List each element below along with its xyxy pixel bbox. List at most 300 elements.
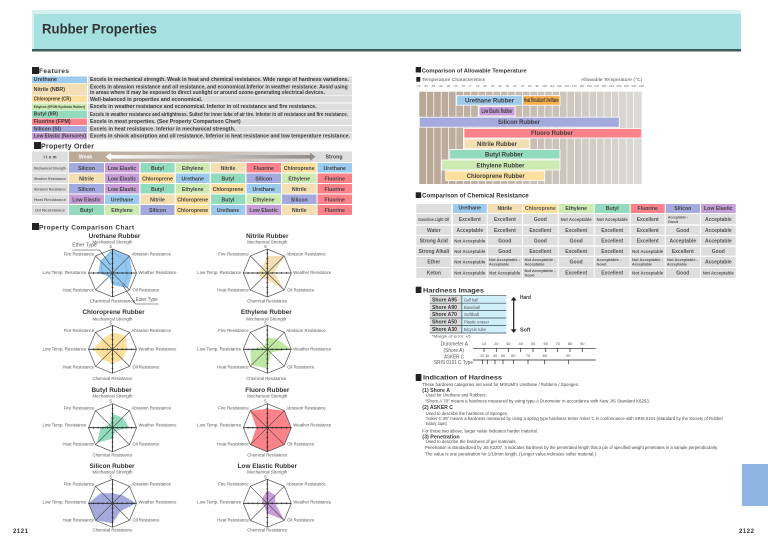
temperature axis labels: -40	[438, 84, 443, 88]
temperature axis labels: 60	[513, 84, 517, 88]
hardness table	[430, 296, 506, 333]
chemical resistance table body: Not Acceptable	[454, 260, 486, 265]
radar chart: silicon rubber	[42, 463, 177, 532]
property order grid: Fluorine	[324, 208, 345, 214]
chemical resistance table body: Strong Alkali	[418, 249, 450, 255]
heading: features: Features	[39, 68, 69, 75]
chemical resistance table body: Good	[570, 238, 583, 244]
arrow: weak to strong	[106, 153, 316, 161]
radar chart: low elastic rubber: Mechanical Strength	[247, 469, 288, 474]
temperature bar labels: Heat Resistant Urethane	[524, 97, 559, 104]
temperature bar labels: Butyl Rubber	[485, 152, 524, 158]
radar chart: low elastic rubber: Oil Resistance	[287, 517, 315, 522]
radar chart: butyl rubber: Oil Resistance	[132, 442, 160, 447]
chemical resistance table header: Chloroprene	[525, 206, 556, 212]
property order grid: Chloroprene	[142, 176, 173, 182]
chemical resistance table body: Acceptable	[456, 228, 483, 234]
radar chart: silicon rubber: Silicon Rubber	[89, 463, 135, 470]
radar chart: butyl rubber: Butyl Rubber	[91, 387, 132, 394]
radar chart: ethylene rubber	[197, 309, 332, 381]
chemical resistance table body: Good	[668, 220, 679, 224]
radar chart: chloroprene rubber	[42, 309, 177, 381]
temperature axis labels: -70	[416, 84, 421, 88]
hardness scale: 10	[482, 341, 487, 346]
hardness scale: 50	[531, 341, 536, 346]
temperature bar labels: Urethane Rubber	[465, 98, 515, 104]
radar chart: chloroprene rubber: Fire Resistance	[64, 328, 95, 333]
chemical resistance table header: Nitrile	[497, 206, 512, 212]
features table: Excels in mechanical strength. Weak in heat and chemical resistance. Wide range of hardness variations.	[90, 77, 350, 83]
radar chart: butyl rubber: Low Temp. Resistance	[42, 423, 87, 428]
hardness explanation text: (1) Shore A	[422, 388, 450, 394]
subheading row: Temperature Characteristics	[422, 77, 486, 82]
features table: Excels in most properties. (See Property Comparison Chart)	[90, 119, 241, 125]
radar chart: fluoro rubber: Low Temp. Resistance	[197, 423, 242, 428]
hardness explanation text: Penetration is standardized by JIS K2207. It indicates hardness by the penetrated length that a pin of specified weight penetrates in a sample perpendicularly.	[425, 445, 718, 450]
hardness explanation text: Used for Urethane and Rubbers.	[426, 392, 487, 398]
radar chart: ethylene rubber: Fire Resistance	[218, 328, 249, 333]
header banner	[32, 10, 741, 52]
chemical resistance table body: Excellent	[601, 228, 624, 234]
property order grid: Silicon	[255, 176, 272, 182]
chemical resistance table body: Gasoline Light Oil	[418, 217, 449, 222]
hardness explanation text: Industry, Japan).	[426, 421, 448, 426]
hardness scale: 70	[555, 341, 561, 346]
temperature axis labels: 30	[491, 84, 495, 88]
property order grid: Butyl	[151, 166, 165, 172]
property order grid: Butyl	[222, 176, 235, 182]
temperature axis labels: 210	[624, 84, 629, 88]
features table: Excels in abrasion resistance and oil resistance, and economical.Inferior in weather resistance. Avoid using	[90, 85, 348, 91]
hardness scale: 80	[568, 341, 573, 346]
radar chart: chloroprene rubber: Heat Resistance	[62, 364, 95, 369]
radar chart: nitrile rubber: 5	[264, 244, 267, 249]
chemical resistance table body: Excellent	[672, 249, 694, 255]
temperature axis labels: 230	[639, 84, 644, 88]
chemical resistance table body: Acceptable -	[596, 258, 622, 262]
temperature axis labels: 50	[506, 84, 509, 88]
features table: Nitrile (NBR)	[34, 87, 65, 93]
chemical resistance table body: Excellent	[565, 249, 588, 255]
chemical resistance table body: Strong Acid	[420, 238, 448, 244]
radar chart: urethane rubber: Urethane Rubber	[89, 233, 141, 240]
property order grid: Ethylene	[288, 176, 310, 182]
page tab	[742, 464, 768, 506]
chemical resistance table body: Excellent	[494, 228, 516, 234]
chemical resistance table body: Acceptable	[705, 217, 732, 223]
radar chart: ethylene rubber: Abrasion Resistance	[286, 328, 326, 333]
temperature bar labels: Silicon Rubber	[498, 119, 541, 126]
hardness explanation text: "Asker C 25" means a hardness measured by using a spring type hardness tester Asker C in conformance with SRIS 0101 (Standard by the Society of Rubber	[425, 416, 724, 421]
temperature range bars	[419, 96, 642, 180]
chemical resistance table body: Not Acceptable	[489, 271, 521, 276]
chemical resistance table body: Not Acceptable	[703, 271, 734, 276]
radar chart: low elastic rubber: Low Elastic Rubber	[238, 463, 297, 470]
features table	[32, 76, 352, 140]
radar chart: fluoro rubber	[197, 387, 332, 457]
temperature axis labels: -50	[431, 84, 436, 88]
radar chart: urethane rubber: Low Temp. Resistance	[42, 270, 87, 275]
features table: Chloroprene (CR)	[34, 97, 71, 103]
temperature stripes	[419, 92, 642, 184]
temperature bar labels: Nitrile Rubber	[477, 141, 518, 148]
radar chart: ethylene rubber: Ethylene Rubber	[241, 309, 292, 316]
property order grid: Urethane	[252, 187, 275, 193]
radar chart: silicon rubber: Mechanical Strength	[92, 469, 133, 474]
property order grid: Abrasion Resistance	[34, 187, 66, 191]
arrow: hard to soft	[511, 295, 531, 334]
features table: Excels in weather resistance and airtightness. Suited for inner tube of air tire. Inferior in oil resistance and fire resistance.	[90, 112, 349, 118]
chemical resistance table body: Acceptable	[705, 238, 732, 244]
temperature axis labels: 0	[469, 84, 471, 88]
radar chart: silicon rubber: Low Temp. Resistance	[42, 499, 87, 504]
radar chart: urethane rubber: Fire Resistance	[64, 252, 95, 256]
chemical resistance table body: Not Acceptable -	[489, 258, 521, 262]
chemical resistance table body: Excellent	[601, 271, 624, 277]
subheading row: Allowable Temperature (°C)	[581, 77, 643, 82]
chemical resistance table body: Not Acceptable	[632, 271, 664, 276]
title: Rubber Properties	[42, 22, 157, 36]
hardness scale: 80	[542, 353, 548, 358]
features table: Excels in weather resistance and economical. Inferior in oil resistance and fire resistance.	[90, 104, 317, 110]
radar chart: chloroprene rubber: Mechanical Strength	[92, 316, 133, 321]
radar chart: low elastic rubber: 5	[264, 474, 267, 479]
chemical resistance table body: Not Acceptable -	[524, 258, 556, 262]
chemical resistance table body: Excellent	[529, 228, 552, 234]
chemical resistance table body: Acceptable	[705, 260, 732, 266]
radar chart: nitrile rubber: Mechanical Strength	[247, 240, 288, 244]
temperature bar labels: Low Elastic Rubber	[482, 108, 513, 115]
hardness table: Golf ball	[464, 297, 478, 302]
panel: chemical resistance	[416, 192, 736, 278]
property order grid: Heat Resistance	[34, 198, 66, 202]
temperature axis labels: 120	[557, 84, 562, 88]
features table: Silicon (SI)	[34, 126, 61, 132]
temperature axis labels: 110	[550, 84, 555, 88]
radar chart: chloroprene rubber: Chemical Resistance	[92, 376, 133, 381]
radar chart: butyl rubber: Chemical Resistance	[92, 452, 133, 457]
radar chart: fluoro rubber: Oil Resistance	[287, 442, 315, 447]
chemical resistance table body: Good	[676, 228, 689, 234]
weak to strong scale: Weak	[79, 154, 92, 160]
chemical resistance table body: Excellent	[637, 228, 659, 234]
radar chart: ethylene rubber: Weather Resistance	[293, 346, 332, 351]
panel: features	[32, 67, 352, 140]
temperature axis labels	[416, 84, 644, 88]
radar chart: fluoro rubber: Chemical Resistance	[247, 452, 288, 457]
panel: hardness images	[416, 287, 596, 366]
chemical resistance table body: Not Acceptable -	[524, 269, 556, 273]
radar chart: low elastic rubber: Abrasion Resistance	[286, 481, 326, 486]
radar chart: urethane rubber: Heat Resistance	[62, 288, 95, 292]
radar chart: butyl rubber: Abrasion Resistance	[132, 406, 172, 411]
hardness explanation text	[422, 382, 724, 456]
radar chart: ethylene rubber: Heat Resistance	[217, 364, 249, 369]
hardness scale: 40	[493, 353, 498, 358]
radar chart: fluoro rubber: Fluoro Rubber	[245, 387, 290, 394]
radar chart: fluoro rubber: Weather Resistance	[293, 423, 332, 428]
hardness explanation text: These hardness categories are used for MISUMI's Urethane / Rubbers / Sponges.	[422, 382, 579, 387]
hardness table: Shore A90	[432, 305, 457, 311]
radar chart: nitrile rubber: Weather Resistance	[293, 270, 332, 275]
radar chart: urethane rubber: Mechanical Strength	[92, 240, 133, 244]
temperature axis labels: 10	[476, 84, 480, 88]
radar chart: nitrile rubber: Heat Resistance	[217, 288, 249, 292]
hardness scale: 60	[543, 341, 549, 346]
property order grid: Chloroprene	[213, 187, 244, 193]
chemical resistance table header: Fluorine	[637, 206, 658, 212]
radar chart: urethane rubber	[42, 233, 177, 304]
chemical resistance table body: Excellent	[459, 217, 481, 223]
property order grid: Nitrile	[79, 176, 94, 182]
features table: Well-balanced in properties and economical.	[90, 97, 203, 103]
chemical resistance table body: Acceptable	[489, 262, 509, 266]
chemical resistance table body: Acceptable	[524, 262, 544, 266]
heading: allowable temperature: Comparison of Allowable Temperature	[422, 68, 527, 74]
hardness scale: Durometer A	[441, 342, 468, 348]
radar chart: low elastic rubber: Weather Resistance	[293, 499, 332, 504]
radar chart: butyl rubber: 5	[110, 399, 112, 404]
chemical resistance table body: Acceptable	[667, 262, 687, 266]
radar chart: butyl rubber: Heat Resistance	[62, 442, 95, 447]
property order grid: Butyl	[222, 197, 235, 203]
temperature axis labels: 200	[616, 84, 622, 88]
chemical resistance table body	[416, 214, 736, 278]
radar chart: urethane rubber: Oil Resistance	[132, 288, 160, 292]
chemical resistance table body: Good	[712, 249, 725, 255]
hardness explanation text: Used to describe the hardness of gel materials.	[426, 439, 517, 444]
property order grid: Low Elastic	[108, 187, 136, 193]
radar chart: fluoro rubber: Abrasion Resistance	[286, 406, 326, 411]
temperature axis labels: 170	[594, 84, 599, 88]
hardness scale: 40	[518, 341, 524, 346]
features table: Excels in heat resistance. Inferior in mechanical strength.	[90, 126, 236, 132]
radar chart: nitrile rubber: Chemical Resistance	[247, 298, 288, 303]
hardness scale: 30	[506, 341, 511, 346]
chemical resistance table body: Not Acceptable -	[667, 258, 699, 262]
hardness scale: 30	[485, 353, 490, 358]
temperature axis labels: 70	[521, 84, 524, 88]
property order grid: Chloroprene	[284, 166, 315, 172]
property order grid: Silicon	[149, 208, 166, 214]
radar chart: ethylene rubber: Oil Resistance	[287, 364, 315, 369]
temperature axis labels: 40	[498, 84, 502, 88]
radar chart: fluoro rubber: Heat Resistance	[217, 442, 249, 447]
temperature bar labels: Ethylene Rubber	[476, 162, 525, 170]
radar chart: silicon rubber: Weather Resistance	[138, 499, 177, 504]
weak to strong scale	[32, 152, 352, 162]
radar chart: nitrile rubber: Low Temp. Resistance	[197, 270, 242, 275]
radar chart: ethylene rubber: Chemical Resistance	[246, 376, 287, 381]
radar chart: chloroprene rubber: Chloroprene Rubber	[82, 309, 145, 316]
temperature axis labels: -60	[424, 84, 428, 88]
features table: Butyl (IIR)	[34, 112, 58, 118]
radar chart: nitrile rubber: Abrasion Resistance	[286, 252, 326, 256]
panel: property comparison chart	[32, 223, 332, 532]
hardness table: Softball	[464, 312, 479, 317]
hardness scale	[434, 341, 596, 366]
chemical resistance table body: Not Acceptable	[454, 238, 486, 243]
chemical resistance table body: Good	[524, 274, 535, 278]
temperature axis labels: 140	[572, 84, 577, 88]
heading: property comparison chart: Property Comparison Chart	[39, 224, 135, 231]
page number: left: 2121	[13, 529, 29, 535]
chemical resistance table body: Acceptable -	[668, 215, 689, 219]
chemical resistance table body: Ether	[427, 260, 440, 266]
radar chart: silicon rubber: Oil Resistance	[132, 517, 160, 522]
hardness explanation text: (3) Penetration	[422, 435, 460, 441]
chemical resistance table header: Butyl	[606, 206, 619, 212]
chemical resistance table body: Good	[534, 217, 547, 223]
property order grid: Low Elastic	[108, 166, 136, 172]
property order grid: Silicon	[78, 187, 95, 193]
hardness table: Bicycle tube	[464, 327, 487, 332]
hardness table: Shore A95	[432, 297, 457, 303]
radar chart: urethane rubber: 5	[110, 244, 112, 249]
property order grid: Fluorine	[324, 176, 345, 182]
chemical resistance table body: Acceptable	[632, 262, 652, 266]
hardness scale: (Shore A)	[444, 348, 464, 354]
radar chart: urethane rubber: Weather Resistance	[138, 270, 177, 275]
features table: Low Elastic (Norsorex)	[34, 134, 86, 140]
chemical resistance table body: Excellent	[637, 238, 659, 244]
arrow: hard to soft: Hard	[520, 295, 531, 301]
page number: right: 2122	[739, 529, 755, 535]
radar chart: chloroprene rubber: Weather Resistance	[138, 346, 177, 351]
weak to strong scale: Item	[44, 154, 57, 160]
temperature axis labels: 160	[587, 84, 592, 88]
property order grid: Ethylene	[253, 197, 275, 203]
radar chart: nitrile rubber: Fire Resistance	[218, 252, 249, 256]
chemical resistance table body: Good	[498, 249, 511, 255]
chemical resistance table body: Good	[534, 238, 547, 244]
property order grid: Low Elastic	[72, 197, 101, 203]
heading: hardness images: Hardness Images	[423, 288, 484, 294]
property order grid: Chloroprene	[177, 208, 208, 214]
hardness explanation text: The value is one penetration for 1/10mm length. (Longer value indicates softer material.)	[425, 452, 597, 456]
heading: property order: Property Order	[41, 144, 94, 150]
property order grid: Urethane	[111, 197, 133, 203]
radar chart: butyl rubber: Weather Resistance	[138, 423, 177, 428]
hardness table: Baseball	[464, 305, 480, 310]
chemical resistance table body: Not Acceptable	[454, 271, 486, 276]
property order grid: Urethane	[181, 176, 204, 182]
chemical resistance table body: Good	[498, 238, 511, 244]
radar chart: low elastic rubber: Low Temp. Resistance	[197, 499, 242, 504]
radar chart: silicon rubber: 5	[110, 474, 112, 479]
heading: chemical resistance: Comparison of Chemical Resistance	[422, 194, 529, 200]
temperature axis labels: -10	[461, 84, 465, 88]
property order grid: Urethane	[323, 166, 346, 172]
chemical resistance table body: Not Acceptable	[561, 217, 592, 222]
chemical resistance table body: Good	[570, 260, 583, 266]
chemical resistance table header: Silicon	[674, 206, 691, 212]
radar chart: fluoro rubber: Fire Resistance	[218, 406, 249, 411]
hardness scale: 60	[511, 353, 516, 358]
property order grid: Urethane	[217, 208, 239, 214]
property order grid: Nitrile	[221, 166, 235, 172]
chemical resistance table header: Low Elastic	[704, 206, 733, 212]
temperature axis labels: 130	[564, 84, 570, 88]
chemical resistance table body: Excellent	[637, 217, 659, 223]
temperature axis labels: 20	[484, 84, 487, 88]
hardness table: Plastic eraser	[464, 320, 490, 325]
radar chart: chloroprene rubber: Low Temp. Resistance	[42, 346, 87, 351]
subheading row	[416, 77, 643, 82]
chemical resistance table body: Keton	[427, 271, 441, 277]
chemical resistance table body: Not Acceptable	[454, 249, 486, 254]
hardness scale: ASKER C	[444, 354, 464, 360]
property order grid: Nitrile	[150, 197, 165, 203]
features table: Urethane	[34, 77, 57, 83]
chemical resistance table body: Excellent	[494, 217, 516, 223]
hardness scale: 90	[580, 341, 585, 346]
radar chart: butyl rubber: Fire Resistance	[64, 406, 95, 411]
chemical resistance table body: Not Acceptable	[632, 249, 664, 254]
panel: allowable temperature	[416, 67, 644, 184]
temperature axis labels: 150	[579, 84, 585, 88]
property order grid: Nitrile	[292, 208, 307, 214]
radar chart: urethane rubber: Abrasion Resistance	[132, 252, 172, 256]
hardness table: Shore A70	[432, 312, 457, 318]
property order grid: Butyl	[80, 208, 94, 214]
panel: indication of hardness	[416, 374, 724, 456]
property order grid: Ethylene	[111, 208, 133, 214]
property order grid: Fluorine	[324, 197, 345, 203]
chemical resistance table header: Ethylene	[565, 206, 587, 212]
hardness table: Shore A30	[432, 327, 457, 333]
chemical resistance table body: Excellent	[565, 271, 588, 277]
chemical resistance table body: Acceptable	[669, 238, 696, 244]
hardness scale: 20	[480, 353, 485, 358]
temperature axis labels: 80	[528, 84, 532, 88]
hardness explanation text: "Shore A 70" means a hardness measured by using type-A Durometer in accordance with New JIS Standard K6253.	[425, 398, 650, 404]
temperature axis labels: -30	[446, 84, 450, 88]
hardness explanation text: Used to describe the hardness of Sponges.	[426, 411, 508, 416]
property order grid	[32, 163, 352, 215]
radar chart: chloroprene rubber: Abrasion Resistance	[132, 328, 172, 333]
property order grid: Low Elastic	[108, 176, 136, 182]
hardness scale: 20	[494, 341, 499, 346]
temperature bar labels: Fluoro Rubber	[531, 130, 574, 137]
property order grid: Oil Resistance	[35, 209, 65, 213]
radar chart: low elastic rubber	[197, 463, 332, 532]
temperature axis labels: 100	[542, 84, 547, 88]
property order grid: Silicon	[78, 166, 95, 172]
radar chart: urethane rubber: Chemical Resistance	[89, 298, 136, 303]
radar chart: fluoro rubber: 5	[264, 399, 267, 404]
chemical resistance table body: Not Acceptable	[597, 217, 628, 222]
radar chart: nitrile rubber: Nitrile Rubber	[246, 233, 289, 240]
callout: ether type: Ether Type	[72, 243, 97, 249]
radar chart: fluoro rubber: Mechanical Strength	[247, 394, 288, 399]
arrow: hard to soft: Soft	[520, 328, 531, 334]
chemical resistance table body: Excellent	[565, 228, 588, 234]
note: margin of error: *Margin of error: ±5	[432, 334, 472, 338]
hardness scale: 50	[501, 353, 506, 358]
property order grid: Weather Resistance	[34, 177, 66, 181]
hardness scale: 90	[566, 353, 571, 358]
chemical resistance table body: Excellent	[601, 238, 624, 244]
radar chart: low elastic rubber: Chemical Resistance	[247, 527, 288, 532]
radar chart: chloroprene rubber: Oil Resistance	[132, 364, 160, 369]
radar chart: nitrile rubber	[197, 233, 332, 303]
heading: indication of hardness: Indication of Hardness	[423, 375, 502, 382]
property order grid: Butyl	[151, 187, 165, 193]
weak to strong scale: Strong	[326, 154, 342, 160]
radar chart: chloroprene rubber: 5	[110, 320, 112, 325]
radar chart: silicon rubber: Chemical Resistance	[92, 527, 133, 532]
